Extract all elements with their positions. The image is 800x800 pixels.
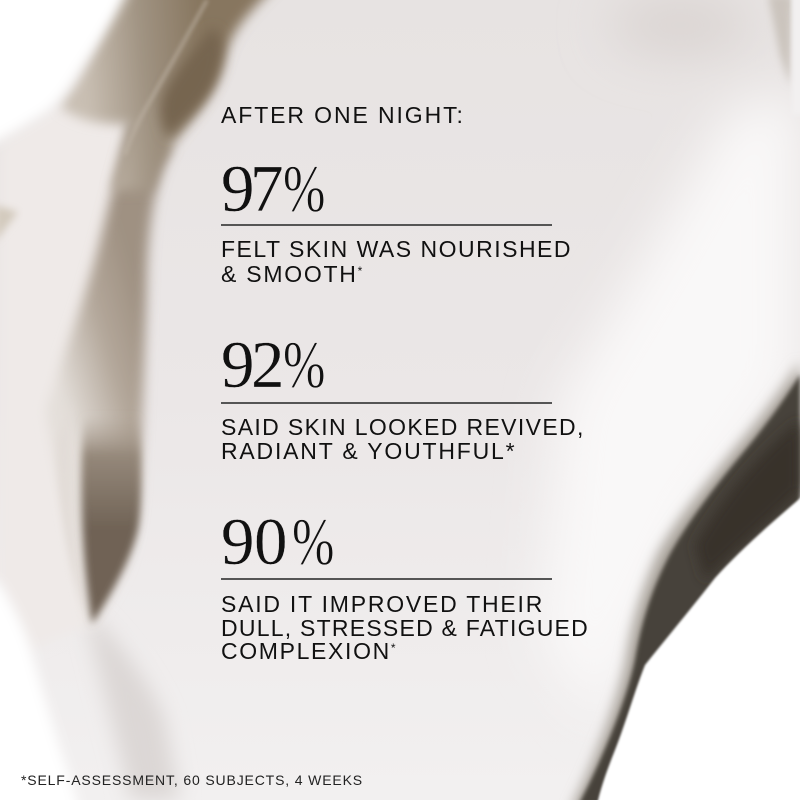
caption 90%: COMPLEXION* xyxy=(221,638,396,664)
number 92%: 9 xyxy=(221,328,254,402)
footnote: *SELF-ASSESSMENT, 60 SUBJECTS, 4 WEEKS xyxy=(21,772,363,788)
upper brown core xyxy=(160,28,222,138)
number 92% xyxy=(221,328,325,402)
stat: 90% xyxy=(221,505,589,664)
caption 97% xyxy=(221,236,572,287)
heading: AFTER ONE NIGHT: xyxy=(221,102,465,128)
lower dark brown xyxy=(82,415,141,624)
top right streak xyxy=(768,0,792,85)
left tan fleck xyxy=(0,205,18,242)
dark right band halo xyxy=(570,362,800,800)
number 97%: 9 xyxy=(221,152,254,226)
caption 90% xyxy=(221,591,589,664)
number 90%: 9 xyxy=(221,505,254,579)
number 90%: 0 xyxy=(254,505,288,579)
caption 97%: & SMOOTH* xyxy=(221,261,362,287)
caption 97%: FELT SKIN WAS NOURISHED xyxy=(221,236,572,262)
white lower right xyxy=(597,490,800,800)
white corners xyxy=(0,0,133,800)
left pale region xyxy=(0,105,130,650)
caption 90%: SAID IT IMPROVED THEIR xyxy=(221,591,544,617)
lower faint fold xyxy=(85,610,180,800)
number 92%: 2 xyxy=(251,328,284,402)
mid band xyxy=(46,118,172,628)
caption 92%: SAID SKIN LOOKED REVIVED, xyxy=(221,414,585,440)
caption 90%: DULL, STRESSED & FATIGUED xyxy=(221,615,589,641)
upper brown xyxy=(60,0,276,190)
caption 92% xyxy=(221,414,585,464)
caption 92%: RADIANT & YOUTHFUL* xyxy=(221,438,516,464)
number 92%: % xyxy=(283,328,325,402)
light streak xyxy=(125,0,207,155)
soft lights on the right xyxy=(540,0,800,720)
number 90%: % xyxy=(292,505,334,579)
stat: 92% xyxy=(221,328,585,464)
pale lower streak xyxy=(58,400,88,615)
number 97% xyxy=(221,152,325,226)
number 90% xyxy=(221,505,334,579)
number 97%: % xyxy=(283,152,325,226)
number 97%: 7 xyxy=(250,152,284,226)
dark right band xyxy=(579,374,800,800)
stat: 97% xyxy=(221,152,572,287)
